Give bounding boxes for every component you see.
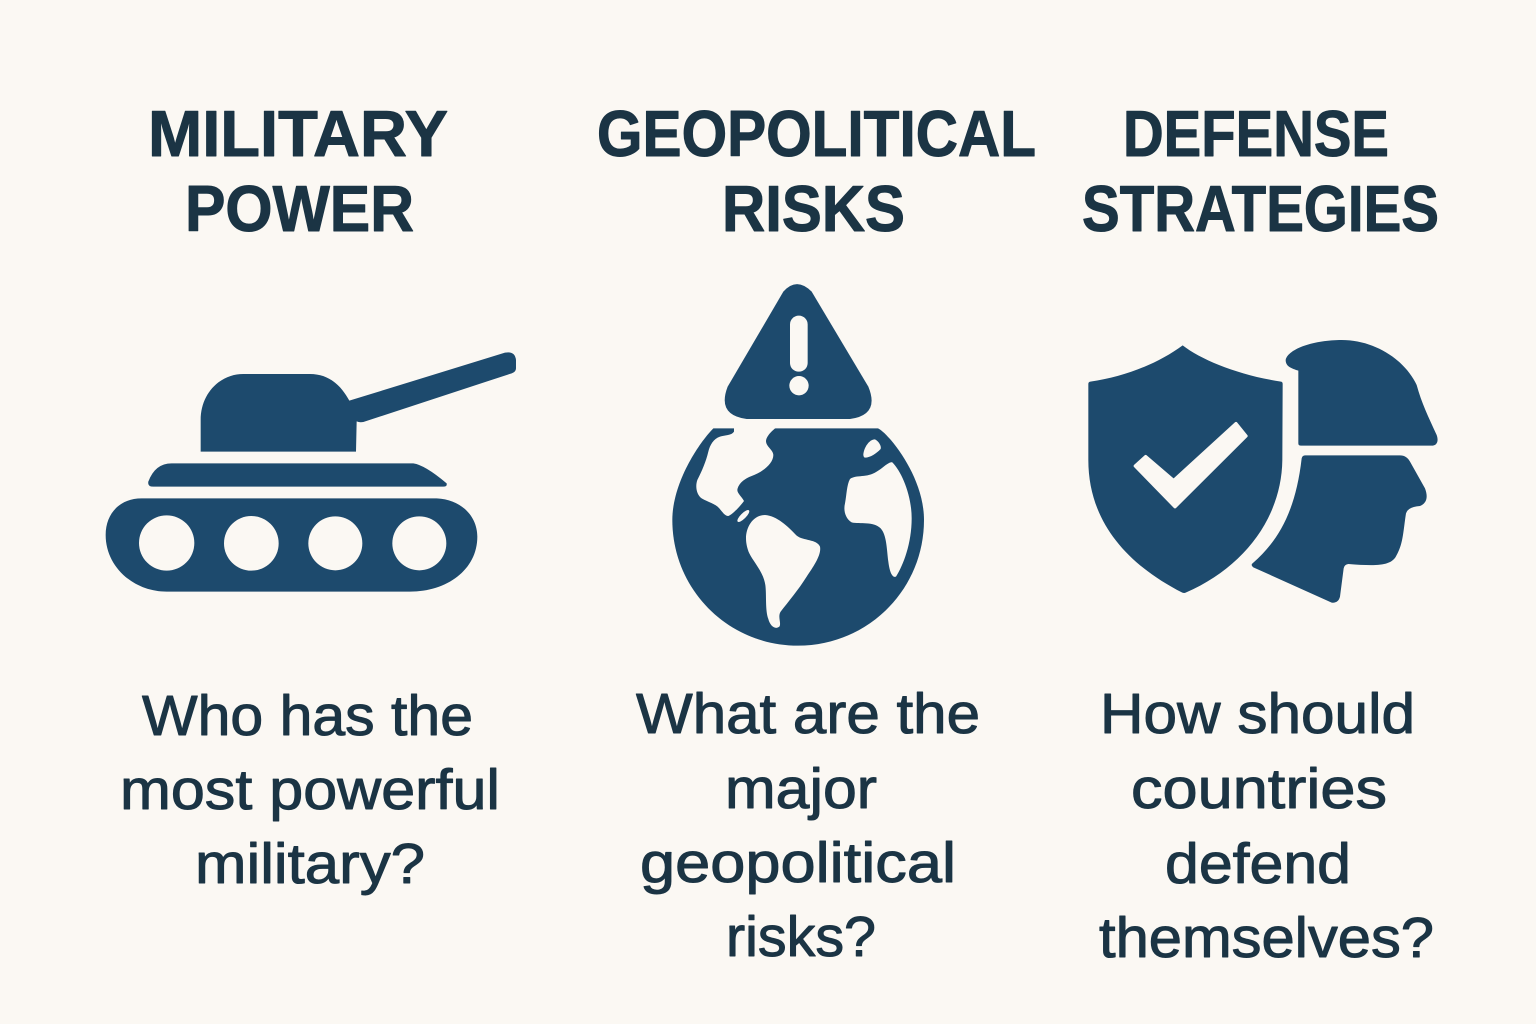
shield with checkmark [1088,345,1283,593]
question: military power [120,684,500,896]
question: military power: most powerful [120,758,500,822]
question: geopolitical risks [636,682,980,969]
question: geopolitical risks: What are the [636,682,980,746]
globe [672,427,924,646]
question: military power: military? [195,832,425,896]
question: defense strategies [1099,682,1434,970]
question: geopolitical risks: major [725,757,877,821]
question: defense strategies: defend [1165,832,1351,896]
heading: geopolitical risks: RISKS [722,172,905,245]
question: defense strategies: themselves? [1099,906,1434,970]
icon: shield and soldier [1088,340,1438,603]
question: defense strategies: countries [1131,757,1387,821]
heading: geopolitical risks: GEOPOLITICAL [597,97,1036,170]
heading: military power: POWER [185,172,414,245]
heading: defense strategies: STRATEGIES [1082,172,1439,245]
heading: military power [148,97,448,245]
warning triangle [725,284,872,419]
soldier head [1252,455,1427,603]
heading: defense strategies [1082,97,1439,245]
heading: geopolitical risks [597,97,1036,245]
question: geopolitical risks: geopolitical [640,831,956,895]
soldier helmet [1286,340,1438,446]
heading: military power: MILITARY [148,97,448,170]
icon: tank [106,352,516,592]
question: geopolitical risks: risks? [726,905,876,969]
question: military power: Who has the [142,684,473,748]
icon: warning globe [672,284,924,646]
question: defense strategies: How should [1100,682,1415,746]
heading: defense strategies: DEFENSE [1123,97,1389,170]
